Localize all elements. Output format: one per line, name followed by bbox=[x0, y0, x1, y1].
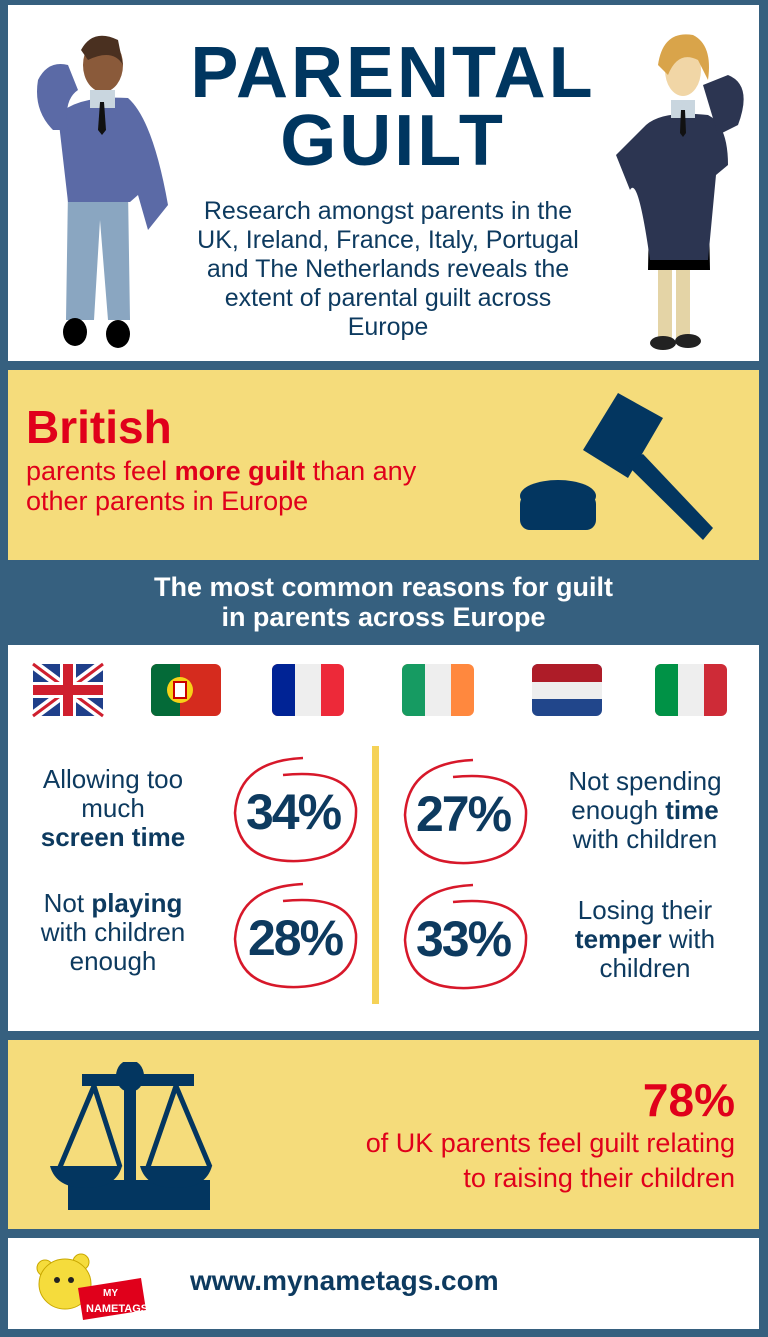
panel: british bbox=[8, 370, 759, 560]
stat: temper: Losing their bbox=[578, 895, 712, 925]
text block: 78% bbox=[366, 1074, 735, 1193]
heading: British: British bbox=[26, 401, 172, 453]
stat: spending time: 27% bbox=[416, 786, 510, 842]
text block: 78%: of UK parents feel guilt relating bbox=[366, 1128, 735, 1158]
stat: playing: Not playing bbox=[44, 888, 182, 918]
text block: intro: Research amongst parents in the bbox=[204, 197, 572, 225]
title bbox=[190, 33, 596, 181]
stat: screen time bbox=[41, 756, 358, 862]
stat: spending time: Not spending bbox=[568, 766, 722, 796]
stat: playing: with children bbox=[41, 917, 185, 947]
heading band bbox=[8, 560, 759, 645]
text block: intro bbox=[197, 197, 579, 341]
divider bbox=[372, 746, 379, 1004]
text block: british: parents feel more guilt than any bbox=[26, 456, 416, 486]
text block: intro: extent of parental guilt across bbox=[225, 284, 551, 312]
icon: mother figure bbox=[616, 34, 744, 350]
stat: spending time: enough time bbox=[571, 795, 719, 825]
stat: playing: enough bbox=[70, 946, 156, 976]
stat: playing: 28% bbox=[248, 910, 342, 966]
icon: father figure bbox=[37, 36, 168, 348]
panel: 78% bbox=[8, 1040, 759, 1229]
title: GUILT bbox=[280, 101, 506, 181]
icon: scales bbox=[50, 1062, 212, 1210]
text block: 78%: to raising their children bbox=[463, 1163, 735, 1193]
panel: footer bbox=[8, 1238, 759, 1329]
icon: logo bear bbox=[36, 1254, 148, 1320]
text block: british bbox=[26, 456, 416, 516]
panel: header bbox=[8, 5, 759, 361]
stat: spending time: with children bbox=[573, 824, 717, 854]
heading band: The most common reasons for guilt bbox=[154, 572, 613, 602]
icon: logo bear: NAMETAGS bbox=[86, 1303, 148, 1315]
text block: british: other parents in Europe bbox=[26, 486, 308, 516]
stat: temper bbox=[404, 884, 715, 990]
stat: screen time: much bbox=[81, 793, 145, 823]
stat: temper: temper with bbox=[575, 924, 715, 954]
text: website: www.mynametags.com bbox=[190, 1265, 499, 1296]
icon: logo bear: MY bbox=[103, 1288, 118, 1299]
stat: screen time: screen time bbox=[41, 822, 185, 852]
heading band: in parents across Europe bbox=[221, 602, 546, 632]
stat: spending time bbox=[404, 758, 722, 864]
text block: intro: UK, Ireland, France, Italy, Portugal bbox=[197, 226, 579, 254]
text block: intro: Europe bbox=[348, 313, 428, 341]
text block: 78%: 78% bbox=[643, 1074, 735, 1126]
stat: screen time: 34% bbox=[246, 784, 340, 840]
stat: temper: 33% bbox=[416, 911, 510, 967]
panel: stats bbox=[8, 645, 759, 1031]
stat: playing bbox=[40, 882, 358, 988]
stat: screen time: Allowing too bbox=[43, 764, 183, 794]
text block: intro: and The Netherlands reveals the bbox=[207, 255, 569, 283]
stat: temper: children bbox=[599, 953, 691, 983]
flags row bbox=[32, 662, 727, 718]
icon: gavel bbox=[520, 393, 713, 540]
title: PARENTAL bbox=[190, 33, 596, 113]
